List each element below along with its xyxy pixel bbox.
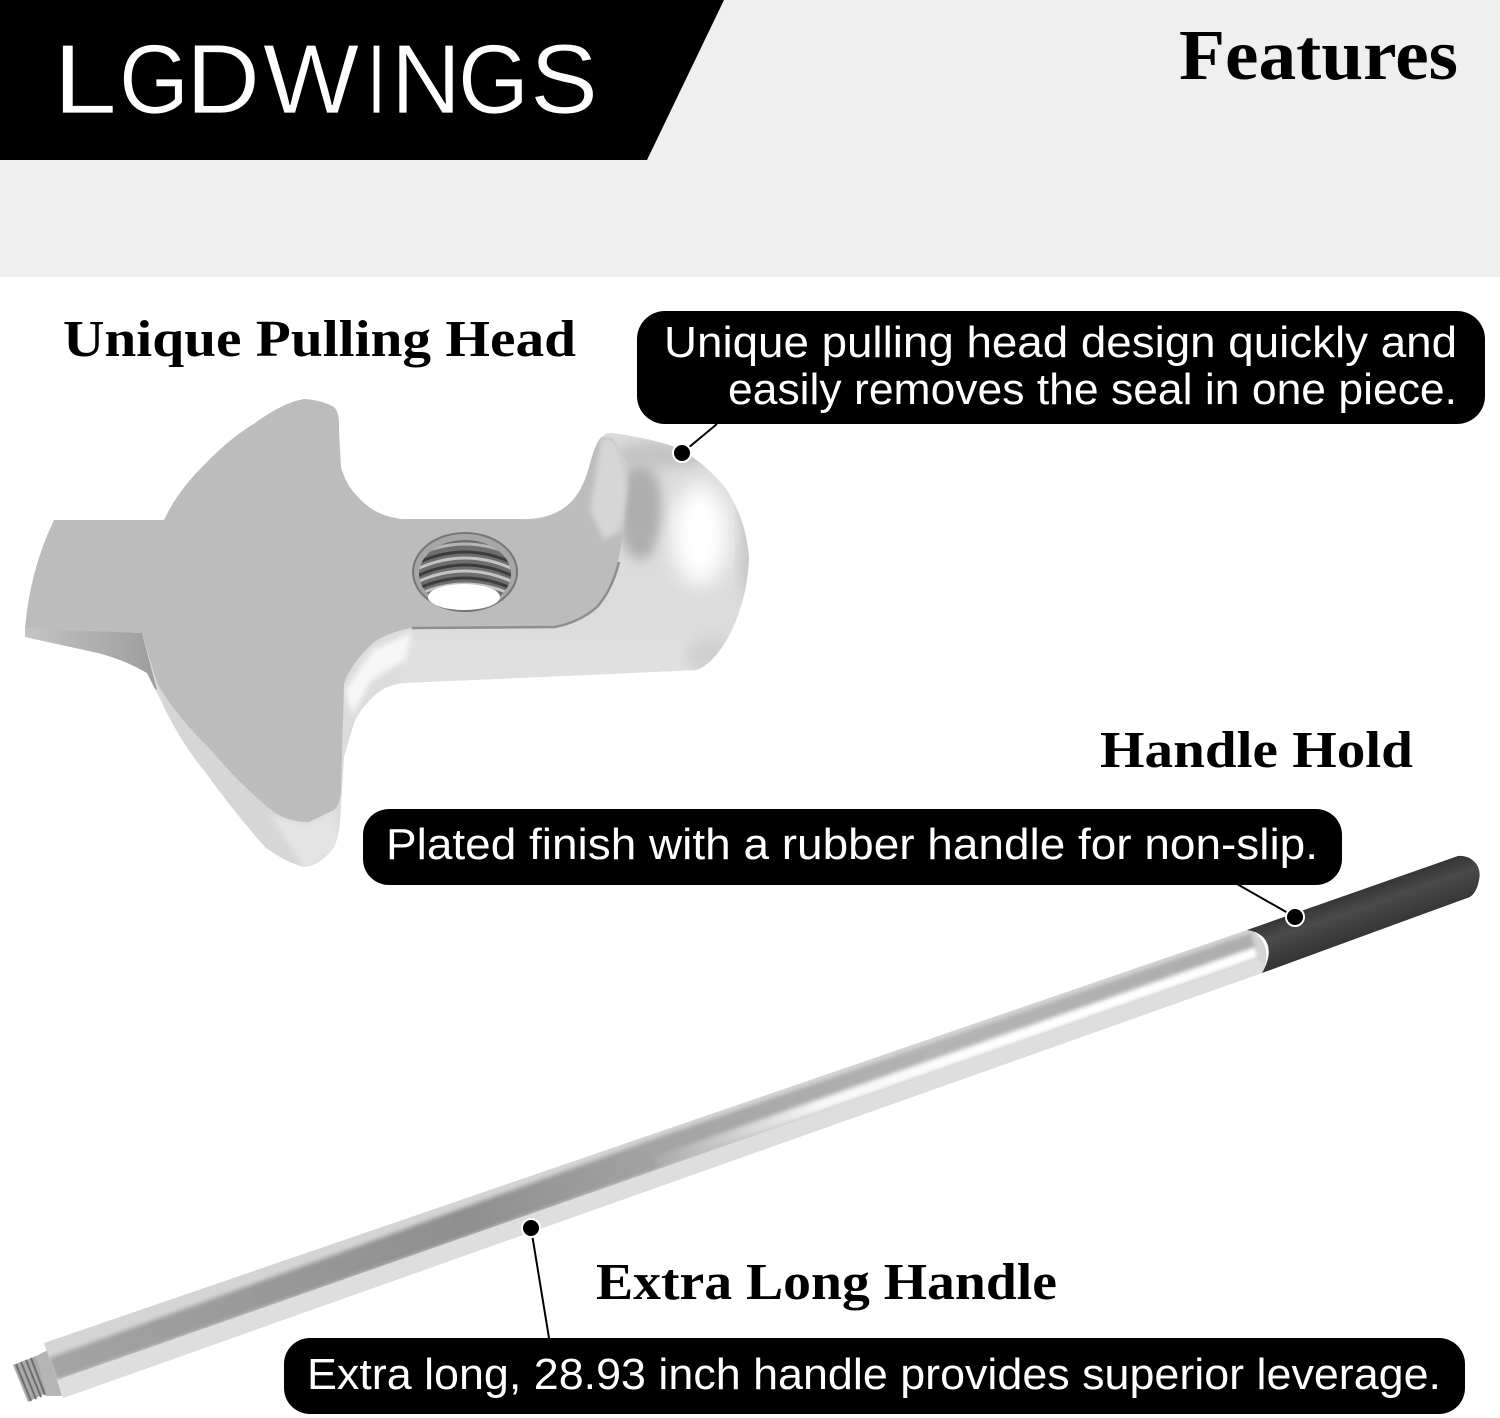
threaded tip xyxy=(13,1350,62,1402)
pulling head tool image xyxy=(25,399,749,867)
heading: Extra Long Handle: Extra Long Handle xyxy=(596,1254,1057,1311)
callout: pulling head: Unique pulling head design quickly and xyxy=(664,318,1457,367)
leader: extra long handle xyxy=(522,1219,549,1338)
heading: Handle Hold: Handle Hold xyxy=(1100,722,1413,779)
threaded hole xyxy=(412,532,518,612)
title: Features: Features xyxy=(1179,15,1458,95)
jaw inner highlight xyxy=(590,437,627,540)
callout: extra long handle: Extra long, 28.93 inch handle provides superior leverage. xyxy=(307,1350,1441,1399)
callout: handle hold xyxy=(363,809,1342,885)
header band xyxy=(0,0,1500,277)
leader: pulling head xyxy=(673,424,717,462)
brand logo text: S xyxy=(530,24,598,134)
brand logo text: G xyxy=(119,24,189,134)
brand logo text: I xyxy=(367,24,386,134)
callout: pulling head xyxy=(637,311,1485,424)
brand logo text: D xyxy=(186,24,260,134)
handle rod image xyxy=(0,856,1480,1418)
callout: handle hold: Plated finish with a rubber handle for non-slip. xyxy=(386,820,1318,869)
brand logo text: N xyxy=(391,24,461,134)
polished dome shading xyxy=(25,441,758,870)
callout: pulling head: easily removes the seal in one piece. xyxy=(728,365,1457,414)
leader: handle hold xyxy=(1237,884,1304,926)
brand logo text: G xyxy=(458,24,529,134)
callout: extra long handle xyxy=(284,1338,1465,1414)
heading: Unique Pulling Head: Unique Pulling Head xyxy=(63,311,576,368)
brand logo text: L xyxy=(53,24,117,134)
brand logo text: W xyxy=(263,24,360,134)
brand banner xyxy=(0,0,724,160)
rubber grip xyxy=(1247,856,1480,973)
flat face xyxy=(25,399,627,822)
metal shaft xyxy=(44,929,1266,1398)
